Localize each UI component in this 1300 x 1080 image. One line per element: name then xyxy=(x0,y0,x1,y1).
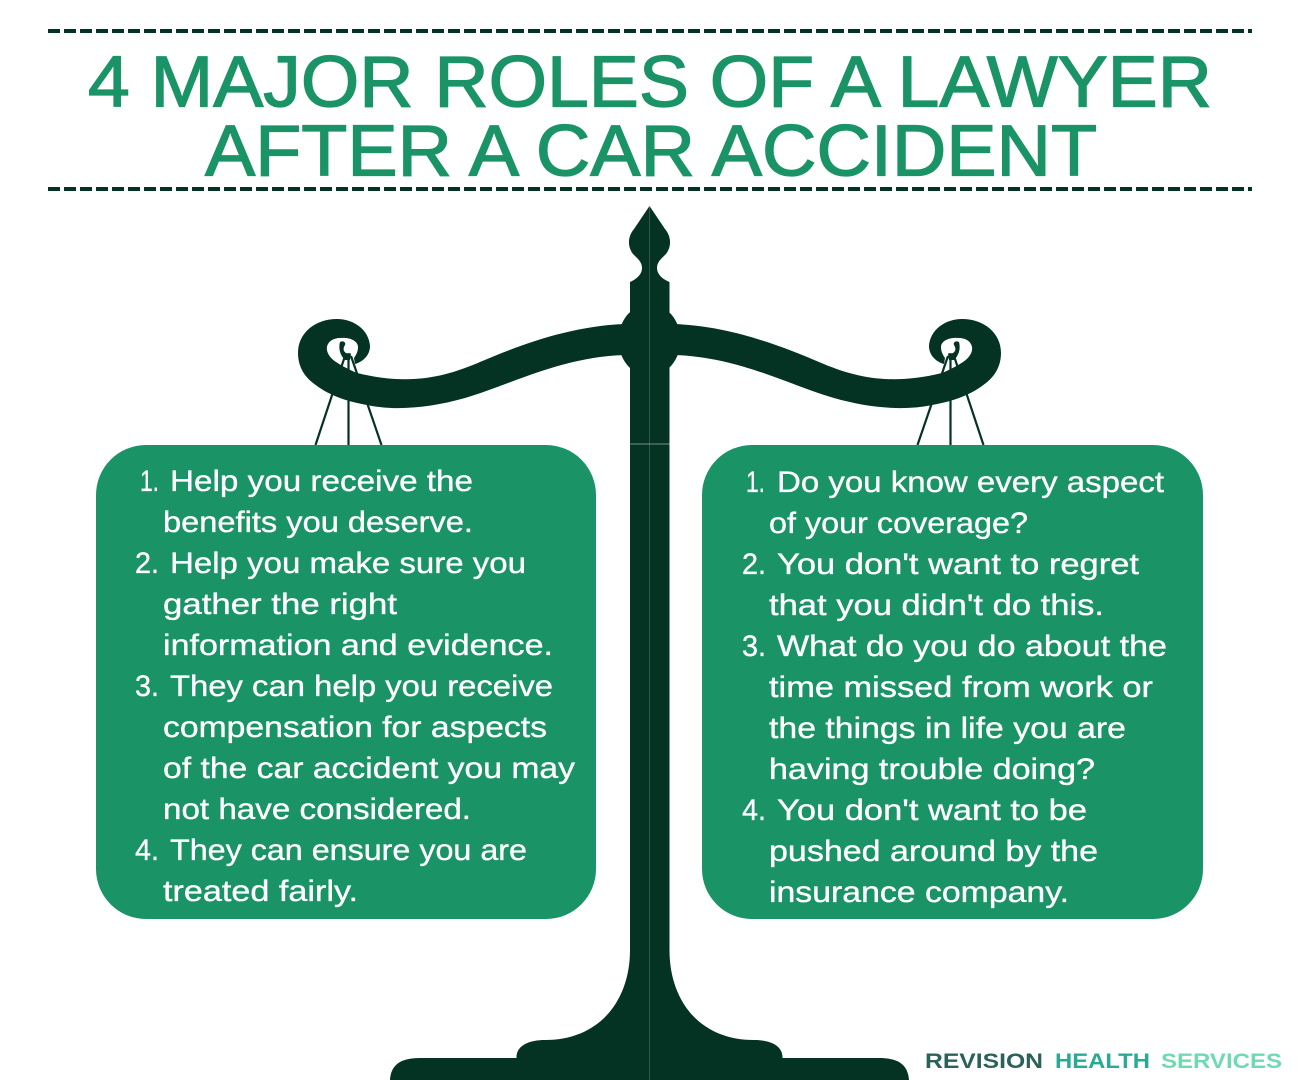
item 2 xyxy=(135,547,553,662)
icon: balance scale xyxy=(298,206,1001,1080)
item 3 xyxy=(135,670,575,826)
panel: left list xyxy=(96,445,596,919)
item 1 xyxy=(140,465,473,539)
title: AFTER A CAR ACCIDENT xyxy=(205,112,1097,192)
item 2: Help you make sure you xyxy=(170,547,526,580)
item 3: of the car accident you may xyxy=(163,752,575,785)
item 2: 2. xyxy=(135,547,159,580)
item 1: 1. xyxy=(140,465,159,498)
item 3: What do you do about the xyxy=(777,630,1167,663)
right arm with scroll xyxy=(674,319,1001,408)
left arm with scroll xyxy=(298,319,625,408)
item 1: of your coverage? xyxy=(769,507,1028,540)
logo: Revision Health Services: REVISION xyxy=(925,1050,1043,1073)
item 3: not have considered. xyxy=(163,793,471,826)
item 3: time missed from work or xyxy=(769,671,1153,704)
item 2: You don't want to regret xyxy=(777,548,1140,581)
right scale strings xyxy=(918,354,984,445)
item 4: treated fairly. xyxy=(163,875,358,908)
item 1: 1. xyxy=(746,466,765,499)
item 4: 4. xyxy=(742,794,766,827)
item 4: 4. xyxy=(135,834,159,867)
item 4: They can ensure you are xyxy=(170,834,527,867)
item 2: that you didn't do this. xyxy=(769,589,1104,622)
item 1: Do you know every aspect xyxy=(777,466,1165,499)
item 1: Help you receive the xyxy=(170,465,473,498)
item 1 xyxy=(746,466,1165,540)
item 2: information and evidence. xyxy=(163,629,553,662)
item 2: 2. xyxy=(742,548,766,581)
scale column and finial xyxy=(390,206,909,1080)
item 1: benefits you deserve. xyxy=(163,506,473,539)
item 3: They can help you receive xyxy=(170,670,553,703)
left scale strings xyxy=(316,354,382,445)
central collar xyxy=(618,304,680,376)
item 2: gather the right xyxy=(163,588,398,621)
logo: Revision Health Services xyxy=(925,1050,1282,1073)
panel: right list xyxy=(702,445,1203,919)
item 4: pushed around by the xyxy=(769,835,1098,868)
item 4 xyxy=(742,794,1098,909)
logo: Revision Health Services: SERVICES xyxy=(1161,1050,1282,1073)
item 4: insurance company. xyxy=(769,876,1069,909)
logo: Revision Health Services: HEALTH xyxy=(1055,1050,1150,1073)
item 3: 3. xyxy=(742,630,766,663)
item 3: the things in life you are xyxy=(769,712,1126,745)
item 3: compensation for aspects xyxy=(163,711,547,744)
title xyxy=(88,42,1212,192)
item 3: 3. xyxy=(135,670,159,703)
item 4: You don't want to be xyxy=(777,794,1087,827)
item 4 xyxy=(135,834,527,908)
item 3: having trouble doing? xyxy=(769,753,1095,786)
item 3 xyxy=(742,630,1167,786)
title: 4 MAJOR ROLES OF A LAWYER xyxy=(88,42,1212,122)
item 2 xyxy=(742,548,1140,622)
